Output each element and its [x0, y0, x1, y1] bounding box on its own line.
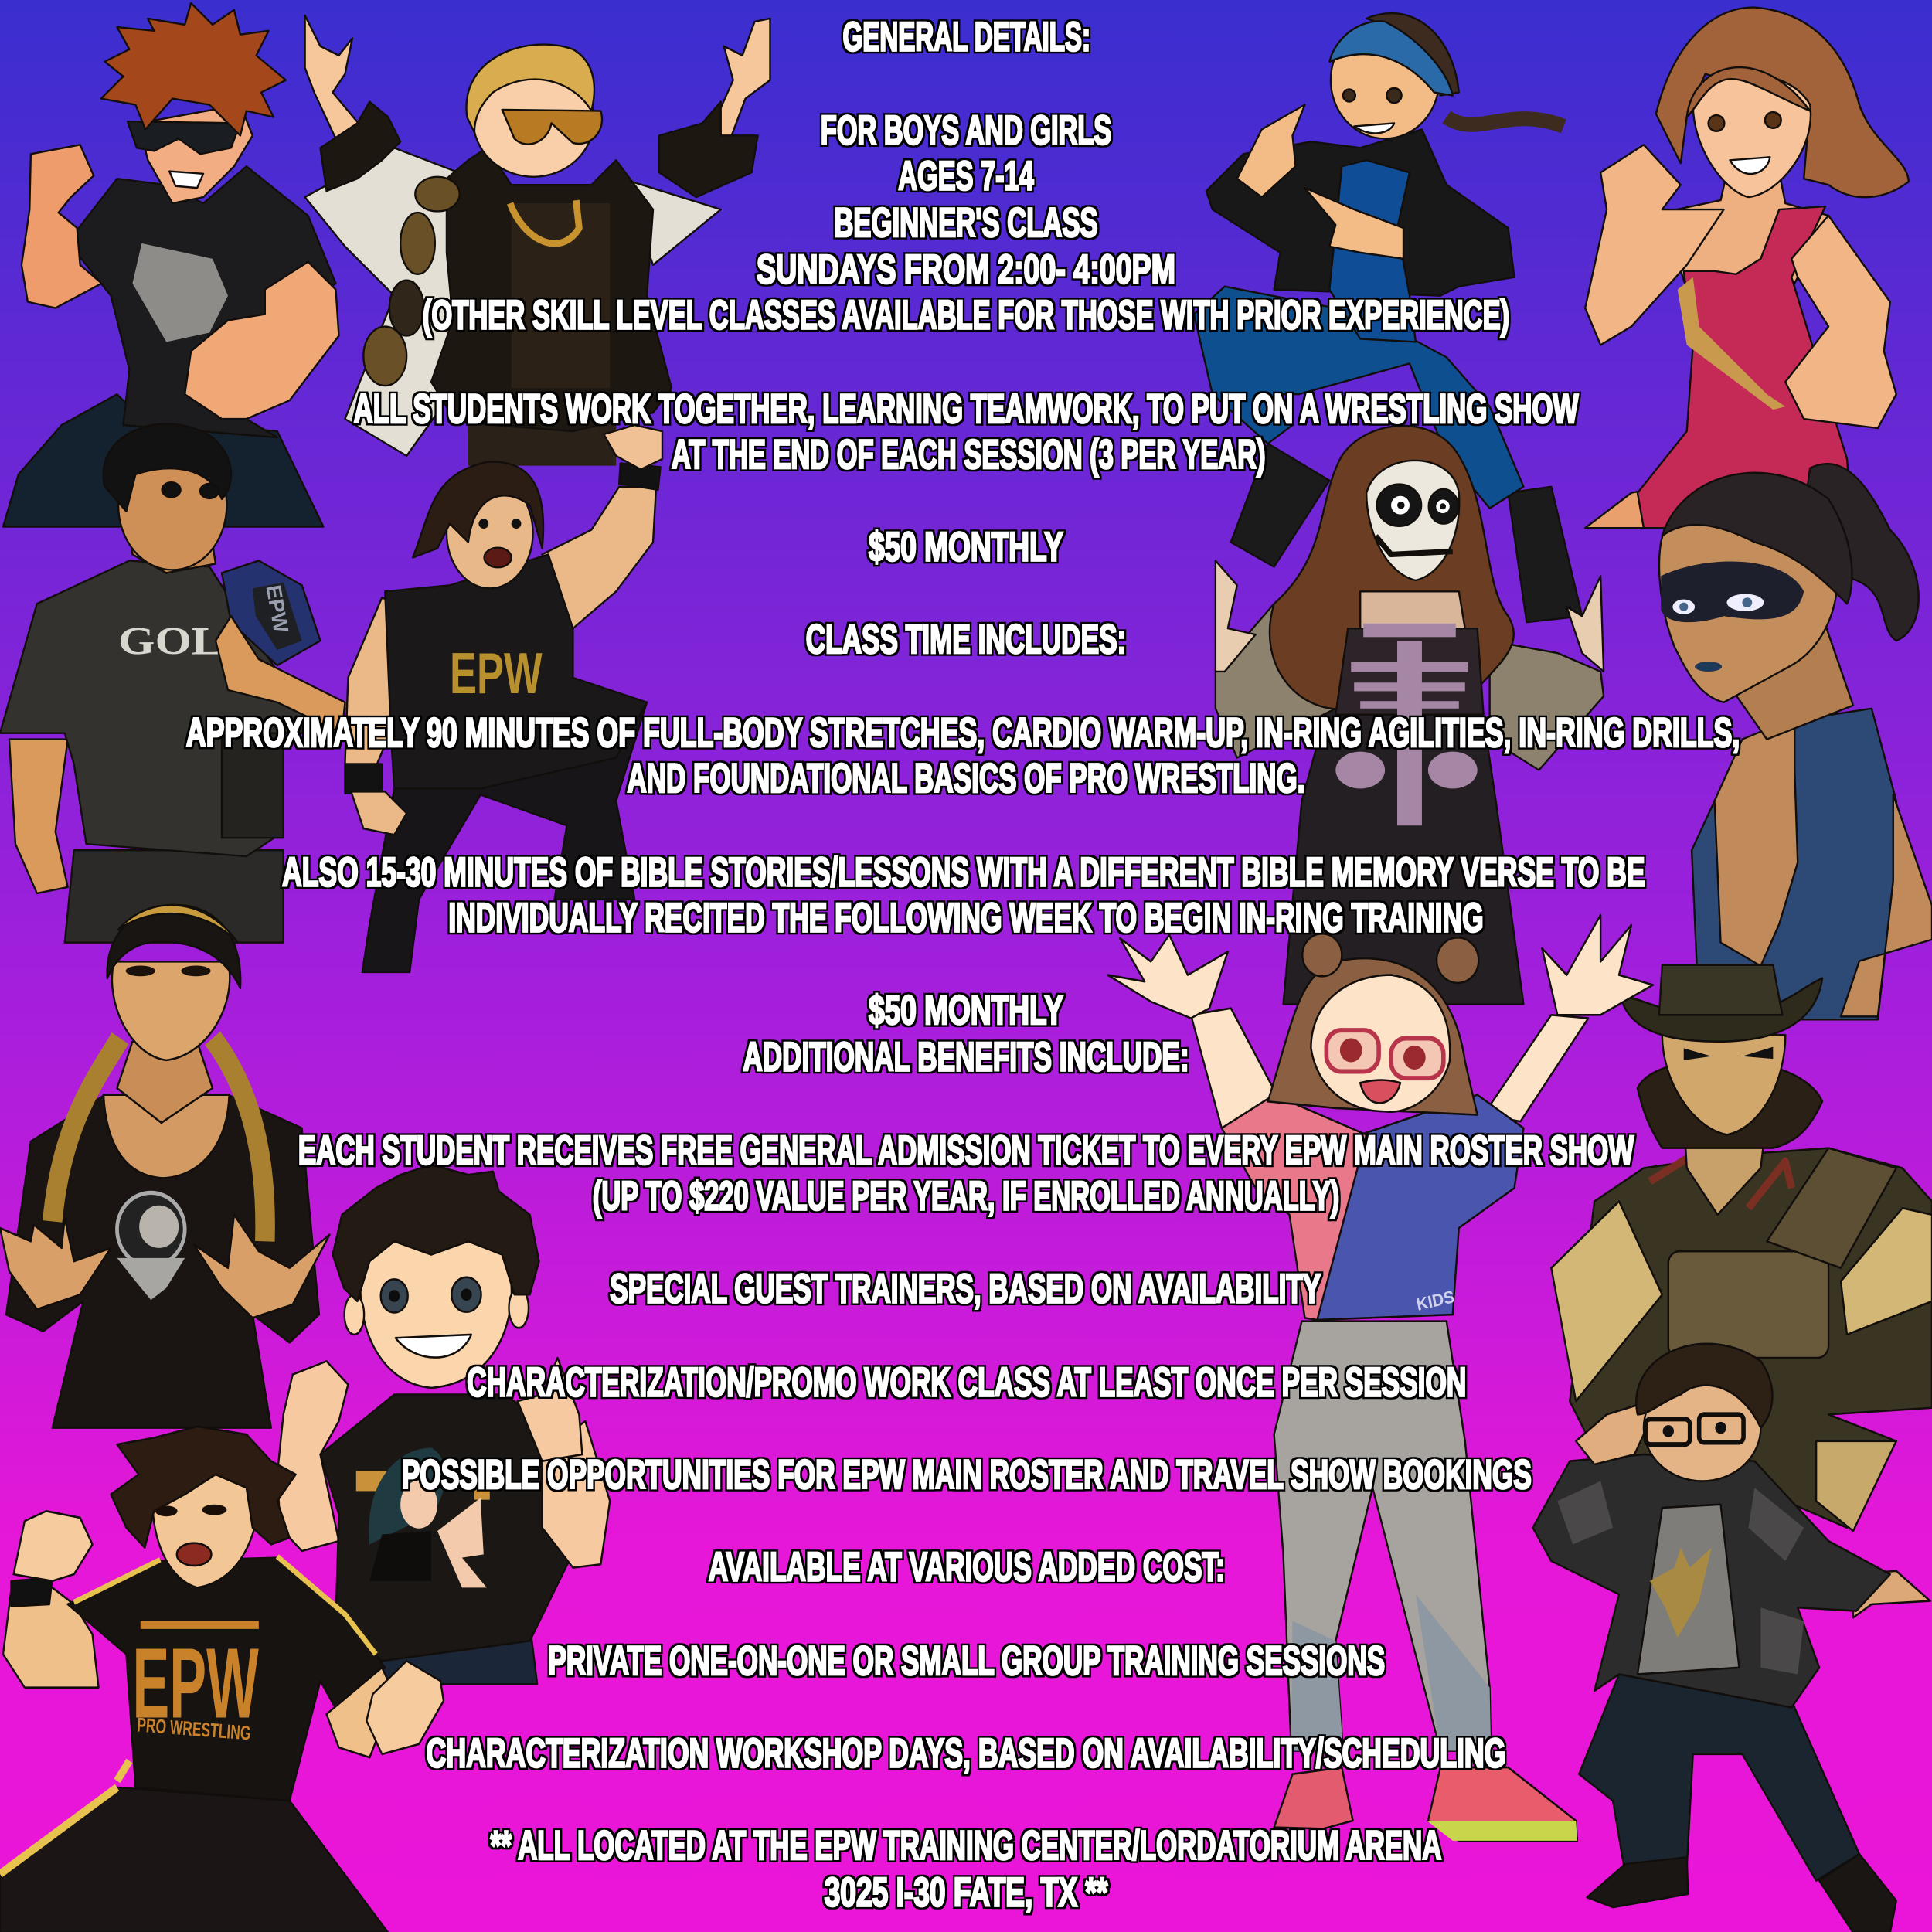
pants	[1579, 1674, 1859, 1881]
text: location	[491, 1823, 1441, 1916]
eyes	[162, 482, 181, 497]
character: boy with championship belt, GOLD shirt: EPW	[261, 583, 294, 634]
open mouth	[1360, 1080, 1400, 1103]
eyes	[126, 966, 155, 976]
blue pants	[1194, 287, 1523, 509]
eyes	[381, 1279, 408, 1312]
pointing hands	[1237, 105, 1304, 197]
hair cap	[1662, 473, 1852, 604]
glasses	[1645, 1414, 1743, 1444]
chest skin and neck	[1662, 172, 1828, 290]
shouting mouth	[485, 548, 512, 567]
character: spiky-haired boy in sunglasses	[3, 3, 338, 527]
right arm	[543, 1421, 610, 1568]
character: shouting wrestler in EPW Pro Wrestling shirt	[0, 1427, 444, 1932]
character: girl with dark eye mask	[1659, 464, 1932, 1019]
character: chibi boy with big grin	[277, 1165, 610, 1684]
text: price and benefits heading: ADDITIONAL BENEFITS INCLUDE:	[743, 1035, 1189, 1080]
eyes	[1343, 90, 1355, 102]
head	[447, 478, 533, 588]
face	[1693, 75, 1811, 197]
coat spots	[415, 177, 460, 211]
text: price: $50 MONTHLY	[869, 524, 1063, 570]
head	[1644, 1375, 1760, 1481]
character: blond kid in fur coat	[305, 15, 770, 466]
neck and face	[117, 1042, 213, 1123]
raised arm	[543, 487, 656, 628]
sunglasses	[128, 121, 240, 154]
text block: class details	[186, 14, 1740, 1916]
character: woman with gold braids	[0, 905, 329, 1428]
legs	[1585, 487, 1668, 528]
wristband	[619, 463, 661, 490]
text: audience and schedule: AGES 7-14	[898, 154, 1034, 199]
heading: class time includes: CLASS TIME INCLUDES:	[806, 617, 1126, 662]
character: cowboy with poncho and backpack	[1551, 965, 1932, 1531]
arms	[1191, 1009, 1281, 1155]
hair	[101, 3, 286, 135]
hat brim	[1622, 978, 1822, 1042]
shoes	[1587, 1857, 1688, 1907]
eyes	[1663, 1425, 1674, 1437]
neck and head	[129, 524, 216, 573]
yellow shirt trim	[74, 1556, 376, 1655]
character: girl with red glasses and raised hands	[1107, 915, 1653, 1841]
text: guest trainers: SPECIAL GUEST TRAINERS, BASED ON AVAILABILITY	[610, 1266, 1321, 1311]
EPW logo	[132, 1621, 259, 1745]
character: blue bandana fighter	[1194, 13, 1582, 622]
character: small boy with glasses saluting	[1532, 1344, 1930, 1932]
left arm	[9, 740, 68, 893]
text: teamwork show	[354, 386, 1579, 478]
text: location: ** ALL LOCATED AT THE EPW TRAINING CENTER/LORDATORIUM ARENA	[491, 1823, 1441, 1869]
red glasses	[1326, 1030, 1444, 1078]
blue tee	[1329, 160, 1416, 342]
gold chain	[510, 200, 579, 243]
yellow trouser stripes	[0, 1760, 129, 1874]
left arm and fist	[277, 1361, 348, 1551]
t-shirt	[0, 560, 345, 856]
eye patches	[1377, 485, 1421, 526]
eyes	[478, 519, 488, 529]
black hair	[104, 424, 231, 512]
right hand	[518, 1358, 582, 1461]
head	[1659, 485, 1838, 702]
hat crown	[1659, 965, 1782, 1015]
coat left white panel	[305, 148, 474, 456]
text: bible lessons	[282, 849, 1645, 940]
neck	[1724, 616, 1853, 740]
hair	[111, 1427, 296, 1548]
shorts	[65, 850, 284, 943]
white skull face	[1366, 461, 1459, 580]
skeleton print	[1335, 624, 1478, 825]
black top	[1335, 628, 1484, 715]
left arm and fist	[1585, 145, 1724, 345]
head	[153, 1473, 259, 1587]
dress	[1284, 678, 1523, 1004]
eyes	[1672, 600, 1695, 614]
text: price and benefits heading: $50 MONTHLY	[869, 988, 1063, 1033]
text: free tickets: (UP TO $220 VALUE PER YEAR, IF ENROLLED ANNUALLY)	[593, 1174, 1339, 1219]
open mouth	[1730, 157, 1770, 174]
character: skull face-paint girl	[1216, 426, 1604, 1004]
face	[138, 105, 253, 203]
coat right white panel	[622, 179, 721, 265]
tan feather sleeves	[1551, 1202, 1662, 1401]
text: teamwork show: AT THE END OF EACH SESSION (3 PER YEAR)	[672, 432, 1265, 478]
braid	[1447, 117, 1563, 126]
jacket camo patches	[1557, 1481, 1804, 1674]
head	[1331, 22, 1439, 138]
heading: general details: GENERAL DETAILS:	[843, 14, 1090, 60]
legs	[362, 702, 647, 972]
right arm and fist	[185, 262, 338, 419]
jacket	[1206, 129, 1515, 296]
body	[6, 1095, 319, 1428]
singlet	[1638, 206, 1853, 528]
fur sleeves	[321, 102, 400, 191]
heading: added cost: AVAILABLE AT VARIOUS ADDED COST:	[709, 1545, 1225, 1590]
eyes	[1684, 1048, 1712, 1060]
smile	[1354, 123, 1394, 133]
EPW logo: PRO WRESTLING	[136, 1714, 251, 1745]
text: price and benefits heading	[743, 988, 1189, 1080]
blond hair	[466, 45, 594, 132]
moon emblem	[117, 1192, 185, 1266]
character: wrestler girl in red singlet	[1585, 8, 1909, 528]
backpack	[1668, 1251, 1828, 1358]
head	[473, 63, 594, 177]
EPW logo: EPW	[132, 1628, 259, 1739]
small character on shirt	[369, 1447, 487, 1587]
belt strap	[222, 733, 284, 838]
text: free tickets	[298, 1128, 1634, 1219]
outstretched hand	[1853, 1571, 1930, 1617]
hair	[1638, 1060, 1822, 1148]
left fist	[14, 1511, 93, 1581]
fur collar and tee	[431, 148, 672, 431]
ears	[345, 1294, 364, 1335]
teeth	[169, 172, 203, 188]
pants	[1274, 1321, 1491, 1751]
right arm and fist	[1785, 216, 1896, 428]
blue top	[1692, 709, 1896, 1019]
mesh sleeves	[1216, 597, 1335, 758]
blue lips	[1695, 662, 1722, 672]
left arm and fist	[22, 145, 102, 308]
hair	[332, 1165, 539, 1301]
boots	[1231, 444, 1329, 566]
hair back	[1656, 8, 1909, 197]
wristband	[11, 1577, 53, 1607]
shirt	[74, 166, 335, 437]
shoulder skin	[1715, 718, 1798, 966]
gold eagle emblem	[1650, 1548, 1712, 1638]
vest	[385, 554, 647, 788]
shirt logo	[132, 243, 228, 342]
aviator sunglasses	[502, 110, 602, 145]
eye mask	[1661, 561, 1804, 622]
eyes	[1709, 115, 1724, 131]
text: training description: AND FOUNDATIONAL BASICS OF PRO WRESTLING.	[628, 756, 1304, 801]
grey tee	[1638, 1505, 1739, 1674]
fist	[604, 425, 662, 469]
jaw stripe	[1376, 536, 1453, 554]
jeans	[382, 1634, 537, 1684]
tee	[321, 1394, 607, 1661]
right arm	[327, 1668, 394, 1757]
text: private sessions: PRIVATE ONE-ON-ONE OR SMALL GROUP TRAINING SESSIONS	[549, 1638, 1385, 1684]
braids	[53, 1038, 120, 1221]
left arm	[3, 1581, 99, 1688]
hair front	[1687, 67, 1810, 117]
pants	[468, 419, 616, 466]
KIDS label: KIDS	[1415, 1286, 1456, 1315]
red collar pattern	[1650, 1155, 1791, 1208]
text: audience and schedule: SUNDAYS FROM 2:00- 4:00PM	[757, 247, 1175, 293]
saluting hand	[1576, 1401, 1650, 1464]
arm and hand on belt	[216, 616, 345, 733]
chest	[104, 1095, 230, 1178]
hair	[413, 462, 543, 557]
EPW logo: EPW	[450, 641, 543, 706]
hair	[1270, 426, 1514, 709]
text: audience and schedule: BEGINNER'S CLASS	[834, 200, 1098, 246]
text: location: 3025 I-30 FATE, TX **	[825, 1870, 1108, 1916]
hands	[0, 1218, 111, 1309]
head	[360, 1208, 512, 1388]
right fist	[366, 1661, 444, 1754]
character: boy with championship belt, GOLD shirt	[0, 424, 345, 943]
hair and bandana	[1366, 13, 1459, 96]
text: audience and schedule: FOR BOYS AND GIRLS	[821, 108, 1111, 154]
far arm skin	[1841, 794, 1932, 1016]
text: audience and schedule	[423, 108, 1509, 338]
chest skin	[1360, 591, 1465, 634]
hair back and buns	[1268, 958, 1478, 1115]
shouting mouth	[177, 1543, 211, 1566]
left arm	[345, 597, 425, 764]
gold sash	[1678, 277, 1785, 410]
headband	[107, 905, 240, 988]
arms and hands	[305, 15, 363, 138]
grin	[396, 1335, 471, 1358]
ponytail	[1804, 464, 1919, 641]
pants	[0, 1787, 388, 1932]
text: promo class: CHARACTERIZATION/PROMO WORK CLASS AT LEAST ONCE PER SESSION	[467, 1359, 1466, 1405]
GOLD shirt text: GOL	[118, 621, 223, 664]
text: training description	[186, 710, 1740, 801]
jacket	[1532, 1454, 1890, 1708]
shirt blue	[1317, 1095, 1523, 1320]
hands	[1107, 935, 1228, 1019]
hands	[1216, 560, 1256, 672]
hair	[1636, 1344, 1772, 1428]
character: angry wrestler in EPW vest	[345, 425, 662, 972]
belt plate	[222, 560, 321, 665]
poncho	[1570, 1148, 1932, 1528]
face	[1662, 1035, 1785, 1134]
lower tan cloth	[1816, 1441, 1896, 1531]
shirt pink	[1222, 1095, 1366, 1320]
eyes	[155, 1505, 178, 1516]
shoes	[1274, 1767, 1353, 1828]
face	[1311, 975, 1450, 1112]
pants	[3, 394, 324, 527]
shirt gold bars	[356, 1471, 393, 1491]
t-shirt	[68, 1558, 385, 1801]
neck	[1684, 1115, 1767, 1215]
